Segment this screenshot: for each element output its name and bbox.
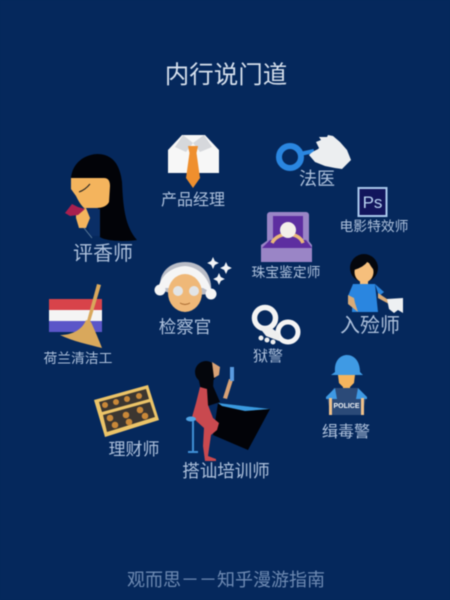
icon: handcuffs <box>254 308 298 344</box>
panel: Dutch cleaner <box>44 284 113 366</box>
icon: police officer: POLICE <box>333 403 360 410</box>
panel: perfumer <box>65 154 137 265</box>
panel: forensic doctor <box>279 135 351 189</box>
panel: mortician <box>340 254 403 337</box>
footer credit: 观而思－－知乎漫游指南 <box>127 570 325 590</box>
label: 搭讪培训师 <box>182 461 270 481</box>
label: 入殓师 <box>340 314 400 337</box>
label: 产品经理 <box>161 191 225 209</box>
panel: narcotics officer <box>322 355 370 441</box>
icon: prosecutor in white wig <box>154 257 232 312</box>
label: 理财师 <box>108 440 160 459</box>
label: 法医 <box>299 169 335 189</box>
panel: prison guard <box>253 308 298 365</box>
panel: film VFX artist <box>340 188 409 234</box>
label: 珠宝鉴定师 <box>252 265 321 280</box>
icon: shirt and tie <box>168 135 219 188</box>
title: 内行说门道 <box>165 61 287 89</box>
panel: product manager <box>161 135 225 209</box>
label: 狱警 <box>253 348 283 365</box>
label: 检察官 <box>159 317 211 337</box>
panel: prosecutor <box>154 257 232 337</box>
icon: woman at bar <box>186 361 270 461</box>
icon: perfumer with flower <box>65 154 137 241</box>
panel: financial planner <box>94 385 160 459</box>
label: 电影特效师 <box>340 219 409 234</box>
icon: Photoshop logo: Ps <box>363 193 382 212</box>
icon: magnifier ring and glove <box>279 135 351 169</box>
icon: abacus <box>94 385 159 437</box>
label: 评香师 <box>73 242 133 265</box>
icon: Dutch flag and broom <box>49 284 102 348</box>
panel: pick-up coach <box>182 361 270 481</box>
icon: ring box <box>261 212 312 262</box>
panel: jewelry appraiser <box>252 212 321 280</box>
label: 缉毒警 <box>322 423 370 441</box>
label: 荷兰清洁工 <box>44 351 113 366</box>
icon: mortician woman with cloth <box>348 254 403 313</box>
